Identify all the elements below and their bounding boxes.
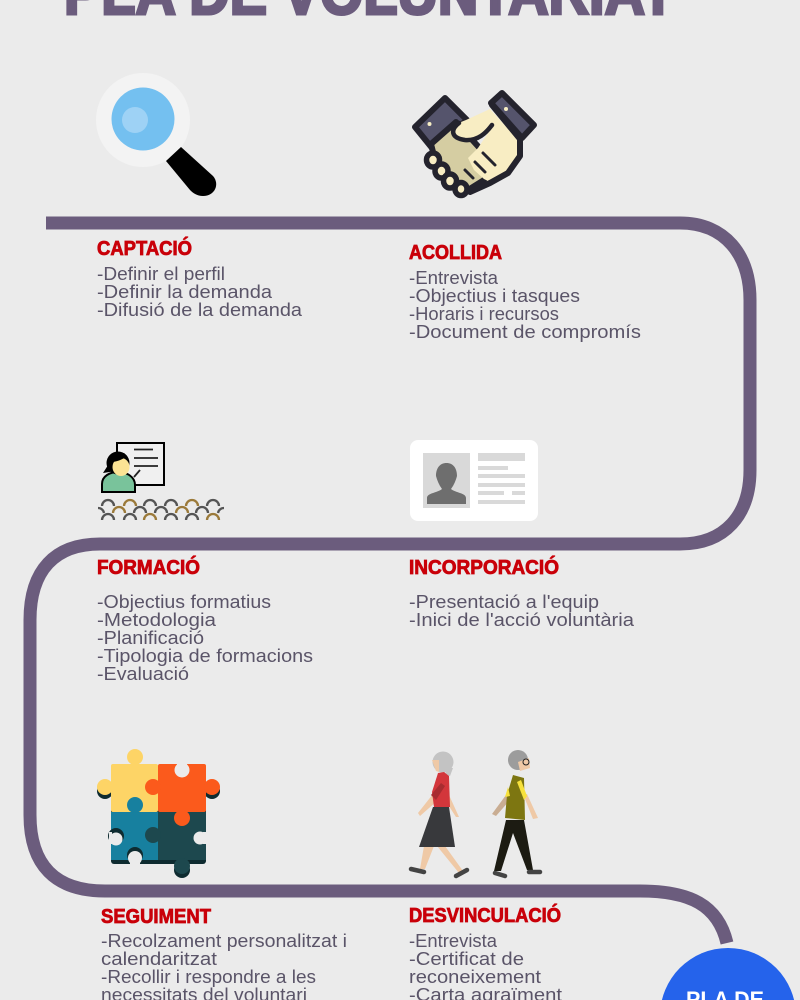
icon: magnifying glass xyxy=(96,73,216,196)
text: seguiment list: -Recollir i respondre a les xyxy=(101,967,316,987)
timeline path xyxy=(30,223,750,943)
text: formació list: -Evaluació xyxy=(97,664,189,684)
text: formació list: -Metodologia xyxy=(97,610,217,630)
text: seguiment list: calendaritzat xyxy=(101,949,217,969)
text: desvinculació list: -Entrevista xyxy=(409,931,498,951)
man xyxy=(492,750,540,876)
icon: trainer and audience xyxy=(98,443,224,520)
badge: pla de xyxy=(660,948,796,1000)
heading: incorporació: INCORPORACIÓ xyxy=(409,555,559,579)
icon: walking people xyxy=(411,750,540,876)
text: acollida list: -Entrevista xyxy=(409,268,499,288)
text: desvinculació list xyxy=(409,931,562,1000)
text: captació list: -Difusió de la demanda xyxy=(97,300,303,320)
text: formació list: -Objectius formatius xyxy=(97,592,271,612)
text: acollida list: -Horaris i recursos xyxy=(409,304,559,324)
text: formació list: -Tipologia de formacions xyxy=(97,646,313,666)
icon: handshake xyxy=(415,93,534,196)
heading: captació: CAPTACIÓ xyxy=(97,236,192,260)
heading: formació: FORMACIÓ xyxy=(97,555,200,579)
heading: desvinculació: DESVINCULACIÓ xyxy=(409,903,561,927)
icon: puzzle xyxy=(97,749,220,878)
text: desvinculació list: reconeixement xyxy=(409,967,541,987)
text: acollida list xyxy=(409,268,641,342)
text: incorporació list: -Inici de l'acció voluntària xyxy=(409,610,635,630)
text: seguiment list xyxy=(101,931,347,1000)
text: incorporació list: -Presentació a l'equip xyxy=(409,592,599,612)
text: formació list: -Planificació xyxy=(97,628,204,648)
text: desvinculació list: -Certificat de xyxy=(409,949,524,969)
text: captació list: -Definir el perfil xyxy=(97,264,225,284)
text: incorporació list xyxy=(409,592,635,630)
text: formació list xyxy=(97,592,313,684)
woman xyxy=(411,752,467,876)
text: captació list xyxy=(97,264,303,320)
text: captació list: -Definir la demanda xyxy=(97,282,273,302)
heading: seguiment: SEGUIMENT xyxy=(101,906,211,928)
icon: ID card xyxy=(410,440,538,521)
text: acollida list: -Document de compromís xyxy=(409,322,641,342)
heading: acollida: ACOLLIDA xyxy=(409,242,502,264)
text: seguiment list: -Recolzament personalitzat i xyxy=(101,931,347,951)
text: acollida list: -Objectius i tasques xyxy=(409,286,580,306)
